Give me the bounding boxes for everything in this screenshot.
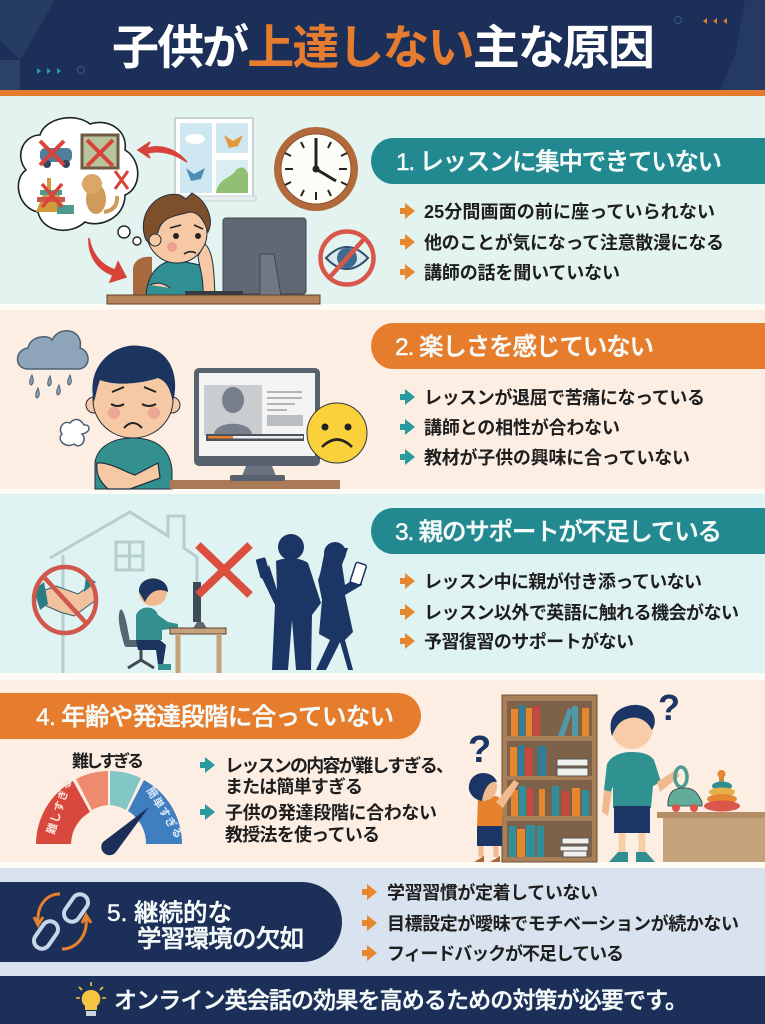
icon: bookshelf bbox=[502, 695, 597, 862]
heading pill 5: 5. 継続的な bbox=[107, 899, 232, 927]
bullet list 5: 目標設定が曖昧でモチベーションが続かない bbox=[387, 913, 739, 934]
icon: monitor with teacher video bbox=[194, 368, 320, 481]
gauge chart: 簡単すぎる bbox=[143, 784, 186, 841]
heading pill 1: 1. レッスンに集中できていない bbox=[396, 148, 722, 176]
closing message: オンライン英会話の効果を高めるための対策が必要です。 bbox=[114, 987, 688, 1013]
bullet list 3: レッスン中に親が付き添っていない bbox=[424, 571, 702, 592]
heading pill 5: 学習環境の欠如 bbox=[137, 925, 304, 953]
heading pill 2: 2. 楽しさを感じていない bbox=[395, 333, 654, 361]
arrow: window to cloud bbox=[138, 142, 187, 162]
bullet list 3: レッスン以外で英語に触れる機会がない bbox=[424, 602, 739, 623]
bullet list 4: または簡単すぎる bbox=[225, 776, 363, 797]
bullet list 5: 学習習慣が定着していない bbox=[387, 882, 598, 903]
icon: table with toys bbox=[657, 770, 765, 862]
panel 2: not enjoying bbox=[0, 310, 765, 489]
panel 5: lack of continuous environment bbox=[0, 868, 765, 976]
panel 1: lack of focus bbox=[0, 96, 765, 304]
bullet list 4 bbox=[200, 755, 454, 845]
icon: sigh puff bbox=[60, 419, 89, 446]
icon: window with birds bbox=[173, 118, 256, 201]
gauge chart: 難しすぎる bbox=[44, 776, 75, 836]
icon: bored boy with crossed arms bbox=[86, 346, 180, 489]
bullet list 3: 予習復習のサポートがない bbox=[424, 631, 634, 652]
icon: light bulb bbox=[76, 982, 106, 1016]
icon: sad face bbox=[307, 403, 367, 463]
icon: house outline bbox=[50, 512, 198, 673]
heading pill 4 bbox=[0, 693, 421, 739]
icon: computer monitor bbox=[185, 218, 306, 296]
heading pill 3 bbox=[371, 508, 765, 554]
desk bbox=[170, 480, 340, 489]
bullet list 1: 25分間画面の前に座っていられない bbox=[424, 202, 715, 222]
bullet list 2: 教材が子供の興味に合っていない bbox=[424, 447, 690, 468]
desk bbox=[107, 295, 320, 304]
icon: parents on phones silhouette bbox=[256, 534, 367, 670]
icon: thought cloud bbox=[18, 118, 141, 245]
icon: broken chain bbox=[31, 891, 91, 952]
bullet list 1 bbox=[400, 202, 724, 283]
heading pill 2 bbox=[371, 323, 765, 369]
bullet list 2: レッスンが退屈で苦痛になっている bbox=[424, 387, 705, 408]
heading pill 3: 3. 親のサポートが不足している bbox=[395, 518, 722, 546]
icon: bored boy at computer bbox=[133, 193, 215, 296]
icon: small child reaching with question mark bbox=[468, 729, 519, 862]
gauge needle bbox=[101, 807, 149, 855]
icon: no eye sign bbox=[320, 232, 374, 284]
bullet list 4: 教授法を使っている bbox=[225, 825, 380, 845]
bullet list 2: 講師との相性が合わない bbox=[424, 417, 620, 438]
icon: wall clock bbox=[274, 127, 358, 211]
bullet list 5 bbox=[362, 882, 739, 964]
icon: older child with toy and question mark: ? bbox=[658, 687, 680, 728]
icon: red cross bbox=[198, 545, 250, 595]
footer banner bbox=[0, 976, 765, 1024]
gauge chart: 難しすぎる bbox=[72, 751, 144, 771]
bullet list 4: 子供の発達段階に合わない bbox=[225, 803, 437, 823]
header banner bbox=[0, 0, 765, 96]
bullet list 4: レッスンの内容が難しすぎる、 bbox=[225, 755, 454, 776]
heading pill 4: 4. 年齢や発達段階に合っていない bbox=[36, 703, 394, 731]
heading pill 5 bbox=[0, 882, 342, 962]
bullet list 2 bbox=[400, 387, 705, 468]
panel 3: lack of parental support bbox=[0, 494, 765, 673]
icon: child at desk bbox=[119, 578, 226, 673]
arrow: cloud to boy bbox=[89, 238, 126, 282]
bullet list 1: 他のことが気になって注意散漫になる bbox=[424, 232, 724, 253]
gauge chart bbox=[36, 751, 186, 855]
bullet list 3 bbox=[400, 571, 739, 652]
icon: small child reaching with question mark: ? bbox=[468, 729, 491, 771]
title: 子供が上達しない主な原因 bbox=[112, 21, 655, 74]
bullet list 1: 講師の話を聞いていない bbox=[424, 263, 620, 283]
panel 4: not suited to age bbox=[0, 680, 765, 862]
heading pill 1 bbox=[371, 138, 765, 184]
icon: no handshake sign bbox=[34, 567, 96, 633]
icon: older child with toy and question mark bbox=[602, 687, 687, 862]
bullet list 5: フィードバックが不足している bbox=[387, 943, 624, 964]
icon: rain cloud bbox=[18, 331, 88, 398]
